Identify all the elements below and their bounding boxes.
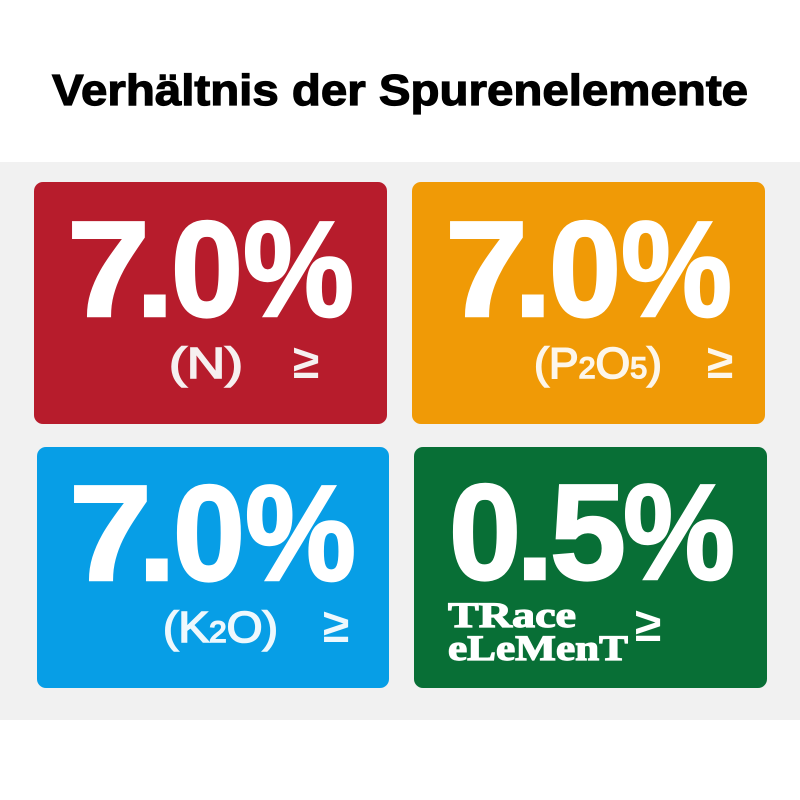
value: nitrogen (67, 193, 354, 345)
label: trace element (448, 595, 628, 668)
value: nitrogen: . (136, 193, 174, 345)
value: phosphate (445, 193, 732, 345)
value: phosphate: . (514, 193, 552, 345)
value: phosphate: 7 (445, 193, 528, 345)
label: P2O5: (P2O5) (534, 339, 662, 388)
value: potash (69, 457, 356, 609)
panel: nitrogen (34, 182, 387, 424)
value: nitrogen: 7 (67, 193, 150, 345)
value: trace element: % (623, 456, 735, 608)
label: K2O: (K2O) (163, 603, 278, 652)
label: trace element: eLeMenT (448, 628, 628, 668)
symbol: at least: ≥ (323, 600, 349, 653)
value: nitrogen: % (243, 193, 354, 345)
value: potash: . (138, 457, 176, 609)
value: potash: 0 (173, 457, 245, 609)
symbol: at least: ≥ (635, 599, 661, 652)
symbol: at least: ≥ (293, 336, 319, 389)
panel: trace element (414, 447, 767, 688)
panel: phosphate (412, 182, 765, 424)
value: potash: 7 (69, 457, 152, 609)
value: trace element (449, 456, 735, 608)
value: trace element: 5 (550, 456, 626, 608)
value: potash: % (245, 457, 356, 609)
value: trace element: . (516, 456, 554, 608)
value: nitrogen: 0 (171, 193, 243, 345)
value: phosphate: 0 (549, 193, 621, 345)
title: Verhältnis der Spurenelemente (52, 66, 748, 115)
value: phosphate: % (621, 193, 732, 345)
label: N: (N) (169, 339, 243, 388)
symbol: at least: ≥ (707, 336, 733, 389)
panel: potash (37, 447, 389, 688)
value: trace element: 0 (449, 456, 521, 608)
label: trace element: TRace (448, 595, 576, 635)
